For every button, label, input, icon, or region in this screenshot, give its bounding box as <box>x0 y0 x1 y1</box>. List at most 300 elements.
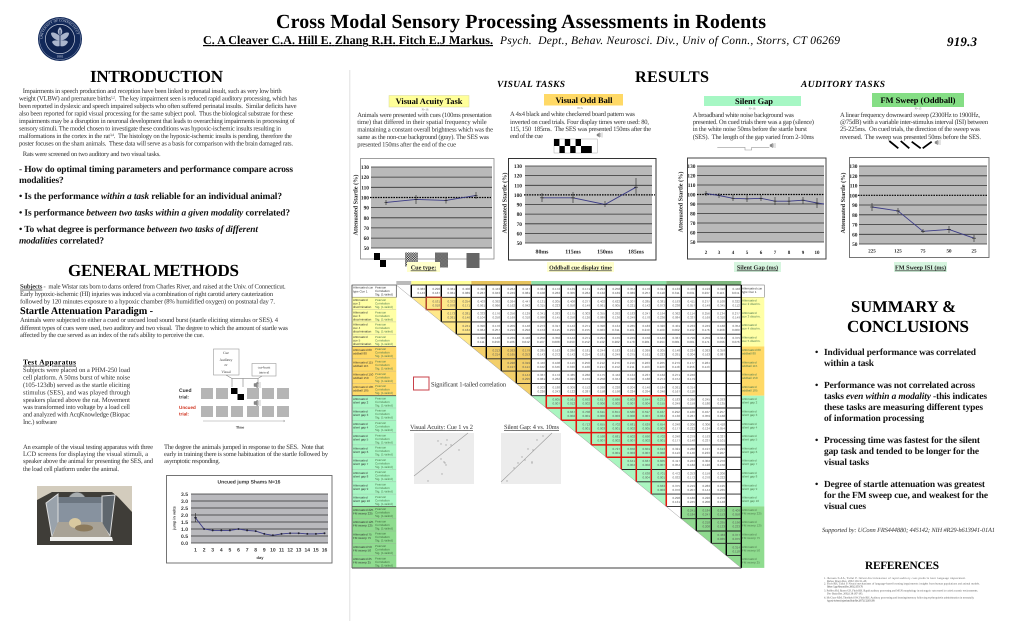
panel: fm sweep oddball <box>840 93 989 272</box>
text block: introduction paragraph: Impairments in speech production and reception have been linked to prenatal insult, such as very low birth <box>23 88 282 95</box>
correlation values: 0.213 0.263 0.179 0.285 0.163 0.286 0.181 0.244 0.183 0.161 0.269 0.205 0.148 0.224 0.263 0.359 <box>492 348 725 352</box>
left row labels: Attenuated <box>353 323 368 327</box>
chart: uncued jump shams <box>166 476 332 563</box>
x axis labels: 6 <box>237 548 240 554</box>
left row labels: Pearson <box>375 446 387 450</box>
correlation values: 0.214 0.165 0.253 0.143 0.272 0.142 0.254 0.181 0.249 0.275 0.161 0.223 0.291 0.204 0.163 0.087 <box>492 352 725 356</box>
x axis labels <box>868 248 977 254</box>
left row labels: oddball 115 <box>353 364 369 368</box>
y axis labels: 130 <box>514 164 522 170</box>
reference list: hypoxic-ischemic injured rats. Brain Res. 2007;1132:203-209. <box>827 600 875 602</box>
y axis labels: 80 <box>690 212 696 218</box>
right row labels: Attenuated <box>742 422 757 426</box>
bullet: across tasks: • <box>815 381 818 391</box>
left row labels: cue 3 <box>353 314 361 318</box>
right row labels: oddball 185 <box>742 388 758 392</box>
right row labels: cue 2 discrim. <box>742 302 761 306</box>
y axis labels: 80 <box>364 216 369 222</box>
text block: test apparatus: Inc.) software <box>23 419 57 426</box>
left row labels: discrimination <box>353 317 372 321</box>
text block: introduction paragraph: sensory stimuli. The model chosen to investigate these conditions was hypoxic-ischemic insults resulting in <box>19 125 282 132</box>
left row labels: Correlation <box>375 474 390 478</box>
x axis labels: 7 <box>246 548 249 554</box>
axis label: silent gap: Silent Gap (ms) <box>737 264 778 272</box>
task description: end of the cue <box>510 133 543 140</box>
heading: general methods: GENERAL METHODS <box>68 261 239 280</box>
text block: subjects: followed by 120 minutes exposure to a hypoxic chamber (8% humidified oxygen) on postnatal day 7. <box>20 298 275 306</box>
y axis labels: 3.0 <box>181 499 188 505</box>
sample size: N=16 <box>749 106 756 110</box>
icon: speaker <box>935 140 940 145</box>
text block: introduction paragraph: been reported in dyslexic and speech impaired subjects who often suffered perinatal insults. Similar deficits have <box>19 103 297 110</box>
x axis labels: 25 <box>972 248 977 254</box>
left row labels: Correlation <box>375 351 390 355</box>
panel: correlation matrix <box>352 281 764 568</box>
task description: @75dB) with a variable inter-stimulus interval (ISI) between <box>840 119 989 126</box>
y axis labels: 100 <box>687 192 696 198</box>
right row labels: Attenuated cue <box>742 286 763 290</box>
correlation values: 0.383 0.296 0.361 0.406 0.492 0.443 0.264 0.447 0.334 0.172 0.139 0.171 0.294 0.258 0.354 0.176 0.314 0.133 0.476 0.193 0.318 0.448 <box>418 287 740 291</box>
left row labels: Sig. (1-tailed) <box>375 465 393 469</box>
correlation values: 0.143 0.187 0.061 0.089 0.267 0.043 0.249 0.081 0.108 0.263 0.305 0.264 0.132 0.169 0.089 0.257 0.118 0.311 0.031 0.237 0.115 0.041 <box>418 291 740 295</box>
left row labels: silent gap 4 <box>353 425 369 429</box>
poster number: 919.3 <box>947 34 978 49</box>
correlation values: 0.184 0.247 0.153 0.058 <box>688 512 740 516</box>
heading: visual tasks: VISUAL TASKS <box>497 80 565 90</box>
y axis labels: 130 <box>849 164 858 170</box>
left row labels: Sig. (1-tailed) <box>375 403 393 407</box>
left row labels: Attenuated cue <box>353 286 374 290</box>
cue box: Cue <box>223 351 229 355</box>
left row labels: Correlation <box>375 424 390 428</box>
right row labels: Attenuated <box>742 508 757 512</box>
left row labels: Attenuated <box>353 310 368 314</box>
chart: attenuated startle by display time <box>502 158 656 272</box>
y axis labels: 60 <box>517 231 522 237</box>
text block: subjects: Subjects - male Wistar rats born to dams ordered from Charles River, and raised at the Univ. of Connecticut. <box>20 284 286 291</box>
chart: attenuated startle by cue type <box>352 158 494 272</box>
left row labels: Attenuated <box>353 446 368 450</box>
left row labels: silent gap 8 <box>353 474 369 478</box>
y axis title: jump in volts <box>172 506 176 531</box>
left row labels: Correlation <box>375 535 390 539</box>
correlation values: 0.531 0.372 0.254 0.403 0.392 0.264 0.447 0.131 0.205 0.408 0.277 0.402 0.622 0.207 0.285 0.381 0.193 0.411 0.277 0.108 0.322 <box>432 299 740 303</box>
text block: research questions: • Is performance between two tasks within a given modality correlated? <box>19 208 290 218</box>
left row labels: Attenuated <box>353 483 368 487</box>
bullet: startle attenuation <box>815 480 988 512</box>
data line <box>386 195 476 202</box>
within-task triangles <box>411 297 741 568</box>
data line <box>542 187 636 204</box>
left row labels: Pearson <box>375 421 387 425</box>
task title <box>872 93 964 107</box>
right row labels: FM sweep 50 <box>742 548 760 552</box>
left row labels: cue 2 <box>353 302 361 306</box>
x axis title: day <box>257 555 264 560</box>
text block: apparatus photo caption: An example of the visual testing apparatus with three <box>23 444 153 451</box>
icon: gap waveform <box>717 147 769 150</box>
left row labels: Sig. (1-tailed) <box>375 305 393 309</box>
axis label: fm sweep isi: FM Sweep ISI (ms) <box>895 264 946 272</box>
right row labels: Attenuated <box>742 385 757 389</box>
panel: summary and conclusions <box>815 297 995 602</box>
x axis labels <box>536 250 645 256</box>
bullet: individual performance: within a task <box>824 359 875 369</box>
x axis labels: 4 <box>732 250 735 256</box>
interval box <box>252 364 276 376</box>
left row labels: Attenuated <box>353 298 368 302</box>
task description <box>357 112 493 148</box>
right row labels: Attenuated <box>742 459 757 463</box>
text block: jump chart caption: asymptotic responding. <box>164 458 220 465</box>
left row labels: type Cue 1 <box>353 290 368 294</box>
reference list: 4. McClure MM, Threlkeld SW, Fitch RH. Auditory processing and learning/memory following erythropoietin administration in neonatally <box>824 596 975 600</box>
left row labels: silent gap 3 <box>353 413 369 417</box>
scatter plot: visual acuity cue 1 vs 2: Visual Acuity: Cue 1 vs 2 <box>410 424 473 431</box>
task description: 115, 150 185ms. The SES was presented 150ms after the <box>510 126 651 133</box>
axis label: silent gap <box>734 262 781 272</box>
left row labels: Correlation <box>375 363 390 367</box>
x axis labels: 14 <box>305 548 310 554</box>
left row labels: discrimination <box>353 305 372 309</box>
left row labels: Pearson <box>375 335 387 339</box>
right row labels: Attenuated <box>742 520 757 524</box>
task description: A linear frequency downward sweep (2300Hz to 1900Hz, <box>840 112 980 119</box>
task title: Visual Odd Ball <box>556 96 613 105</box>
text block: introduction paragraph: poster focuses on the sham animals. These data will serve as a basis for comparison with the brain damaged rats. <box>19 140 293 147</box>
sample size: N=16 <box>422 108 429 112</box>
axis label: cue type: Cue type: <box>411 264 436 272</box>
left row labels: Correlation <box>375 486 390 490</box>
text block: introduction paragraph: 1,2 <box>111 96 115 100</box>
bullet: startle attenuation: visual cues <box>824 502 866 512</box>
right row labels: Attenuated <box>742 483 757 487</box>
right row labels: silent gap 7 <box>742 462 758 466</box>
left row labels: silent gap 7 <box>353 462 369 466</box>
task description: inverted on cued trials. Four display times were used: 80, <box>510 119 649 126</box>
correlation values: 0.638 0.701 0.472 0.253 0.159 0.206 <box>642 472 725 476</box>
y axis title: Attenuated Startle (%) <box>678 172 684 232</box>
icon: speaker <box>597 132 602 138</box>
task description: maintaining a constant overall brightness which was the <box>357 126 493 134</box>
bullet: processing time: Processing time was fastest for the silent <box>824 436 981 446</box>
left row labels: Pearson <box>375 298 387 302</box>
task description <box>840 112 989 141</box>
x axis labels: 8 <box>254 548 257 554</box>
icon: checkerboard stimulus <box>554 139 597 153</box>
left row labels: Pearson <box>375 482 387 486</box>
right row labels: FM sweep 125 <box>742 524 762 528</box>
y axis labels: 100 <box>514 193 522 199</box>
right row labels: FM sweep 225 <box>742 511 762 515</box>
task title <box>704 96 801 106</box>
correlation values: 0.241 0.396 0.176 0.209 0.148 0.273 0.317 0.142 0.271 0.398 0.134 0.265 0.183 0.326 0.401 0.233 0.249 0.168 0.354 <box>462 324 740 328</box>
x axis labels: 2 <box>705 250 708 256</box>
left row labels: Pearson <box>375 409 387 413</box>
axis label: oddball cue display time: Oddball cue display time <box>549 264 612 272</box>
correlation values: 0.007 0.012 0.002 0.006 0.002 0.007 0.004 0.155 0.249 0.159 0.180 0.135 <box>552 402 725 406</box>
x axis labels: 225 <box>868 248 876 254</box>
right row labels: Attenuated <box>742 446 757 450</box>
icon: speaker on uncued row <box>254 400 260 406</box>
left row labels: silent gap 2 <box>353 401 369 405</box>
right row labels: Attenuated <box>742 545 757 549</box>
left row labels: Pearson <box>375 544 387 548</box>
left row labels: Correlation <box>375 326 390 330</box>
cued trial squares <box>201 388 289 400</box>
bullet: individual performance: • <box>815 348 818 358</box>
right row labels: oddball 115 <box>742 364 758 368</box>
left row labels: Attenuated <box>353 335 368 339</box>
chart: attenuated startle by ISI <box>840 158 989 272</box>
right row labels <box>742 286 763 565</box>
scatter plot: silent gap 4 vs 10ms <box>501 424 561 484</box>
bullet: across tasks <box>815 381 987 424</box>
axis label: cue type <box>407 262 440 272</box>
text block: test apparatus: Test Apparatus <box>23 358 76 367</box>
left row labels: Attenuated 185 <box>353 385 374 389</box>
correlation values: 0.144 0.367 0.172 0.485 0.266 0.175 0.442 0.134 0.237 0.162 0.271 0.246 <box>522 373 695 377</box>
task title: Visual Acuity Task <box>396 97 463 106</box>
left row labels: oddball 150 <box>353 376 369 380</box>
left row labels: Attenuated <box>353 397 368 401</box>
task title: Silent Gap <box>735 97 773 106</box>
heading: startle attenuation paradigm: Startle Attenuation Paradigm - <box>20 306 154 317</box>
right row labels: cue 4 discrim. <box>742 327 761 331</box>
left row labels: oddball 80 <box>353 352 367 356</box>
right row labels: Attenuated <box>742 532 757 536</box>
correlation values: 0.002 0.001 0.006 0.003 0.008 0.007 0.034 0.136 0.267 0.059 0.168 <box>568 414 725 418</box>
legend: significant correlation <box>414 377 507 390</box>
correlation values: 0.118 <box>732 549 740 553</box>
correlation values: 0.173 0.281 0.333 0.176 0.256 0.129 0.341 0.283 0.175 0.303 0.355 0.292 0.183 0.247 0.194 0.362 0.114 0.256 0.134 0.277 <box>448 312 740 316</box>
left row labels: FM sweep 75 <box>353 536 371 540</box>
correlation values: 0.598 0.681 0.602 0.690 0.702 0.248 0.279 0.193 0.337 <box>598 435 725 439</box>
icon: university seal logo <box>38 17 82 61</box>
interval box: interval <box>259 370 269 374</box>
right row labels: silent gap 3 <box>742 413 758 417</box>
text block: introduction paragraph: impairments may be a disruption in neuronal development that leads to overarching impairments in processing of <box>19 118 296 125</box>
left row labels: oddball 185 <box>353 388 369 392</box>
task title <box>389 96 469 107</box>
x axis labels: 4 <box>220 548 223 554</box>
y axis labels <box>181 492 188 547</box>
x axis labels: 8 <box>788 250 791 256</box>
reference list: Behav Brain Res. 2002;136:31-49. <box>827 580 867 583</box>
correlation values: 0.004 0.001 0.032 0.172 0.278 0.222 <box>642 476 725 480</box>
y axis labels: 1.0 <box>181 527 188 533</box>
left row labels: Correlation <box>375 437 390 441</box>
right row labels: Attenuated 80 <box>742 348 761 352</box>
y axis labels: 60 <box>364 236 369 242</box>
sample size: N=6 <box>577 106 583 110</box>
task title <box>544 94 623 106</box>
bullet: across tasks: tasks even within a modality -this indicates <box>824 392 987 402</box>
left row labels: Attenuated 225 <box>353 508 374 512</box>
y axis labels: 50 <box>517 241 522 247</box>
x axis labels: 125 <box>894 248 902 254</box>
left row labels: Sig. (1-tailed) <box>375 416 393 420</box>
text block: subjects: Early hypoxic-ischemic (HI) injuries was induced via a combination of right carotid artery cauterization <box>20 291 274 298</box>
right row labels: silent gap 5 <box>742 438 758 442</box>
text block: research questions <box>19 165 293 246</box>
cue box: Auditory <box>220 358 233 362</box>
left row labels <box>353 286 393 567</box>
x axis labels: 9 <box>263 548 266 554</box>
right row labels: oddball 150 <box>742 376 758 380</box>
left row labels: Correlation <box>375 400 390 404</box>
left row labels: Attenuated 115 <box>353 360 373 364</box>
text block: paradigm description: Animals were subjected to either a cued or uncued loud sound burst (startle eliciting stimulus or SES). 4 <box>20 317 279 324</box>
left row labels: Attenuated 75 <box>353 532 372 536</box>
scatter plot: visual acuity cue 1 vs 2 <box>410 424 474 484</box>
right labels background <box>741 285 764 568</box>
left row labels: Attenuated 150 <box>353 373 374 377</box>
axis label: oddball cue display time <box>547 262 614 272</box>
correlation values: 0.463 0.377 <box>718 533 740 537</box>
y axis labels <box>361 165 369 252</box>
diagram: cued and uncued trial timeline <box>179 349 289 430</box>
text block: introduction paragraph: 3,4 <box>110 133 114 137</box>
y axis labels: 2.5 <box>181 506 188 512</box>
bullet: across tasks: of information processing <box>824 414 924 424</box>
right row labels: Attenuated <box>742 298 757 302</box>
bullet: processing time: gap task and tended to be longer for the <box>824 447 979 457</box>
bullet: startle attenuation: for the FM sweep cue, and weakest for the <box>824 491 988 501</box>
text block: research questions: modalities? <box>19 176 64 186</box>
right row labels: Attenuated <box>742 335 757 339</box>
correlation values: 0.184 0.064 0.257 0.219 0.292 0.153 0.115 0.299 0.155 0.063 0.311 0.161 0.249 0.109 0.062 0.192 0.176 0.268 0.089 <box>462 328 740 332</box>
funding note: Supported by: UConn FRS444880; 445142; NIH #R29-h613941-01A1 <box>822 527 995 534</box>
matrix header band <box>396 281 741 285</box>
left row labels: cue 5 <box>353 338 361 342</box>
text block: jump chart caption: early in training there is some habituation of the startle followed by <box>164 451 329 458</box>
left row labels: Attenuated <box>353 410 368 414</box>
data line <box>196 518 324 535</box>
y axis labels: 110 <box>850 184 858 190</box>
task description: (SES). The length of the gap varied from 2-10ms <box>693 134 814 141</box>
data line <box>706 194 824 204</box>
text block: introduction paragraph: . The histology on the hypoxic-ischemic insults is pending, therefore the <box>114 133 292 140</box>
text block: introduction paragraph: Rats were screened on two auditory and two visual tasks. <box>23 151 161 158</box>
reference list: 1. Benasich AA, Tallal P. Infant discrimination of rapid auditory cues predicts later language impairment. <box>824 577 966 580</box>
correlation values: 0.727 0.650 0.601 0.613 0.321 0.288 0.197 0.219 <box>612 447 725 451</box>
y axis labels: 120 <box>361 175 369 181</box>
y axis labels: 2.0 <box>181 513 188 519</box>
correlation values: 0.298 0.186 0.226 0.278 <box>672 496 725 500</box>
correlation values: 0.713 0.655 0.702 0.681 0.629 0.654 0.248 0.206 0.306 0.418 <box>582 422 725 426</box>
y axis labels: 50 <box>364 246 369 252</box>
bullet: individual performance <box>815 348 977 369</box>
left row labels: Correlation <box>375 560 390 564</box>
y axis labels: 120 <box>849 174 858 180</box>
left row labels: Sig. (1-tailed) <box>375 379 393 383</box>
task description: reversed. The sweep was presented 50ms before the SES. <box>840 134 981 141</box>
text block: test apparatus: stimulus (SES), and was played through <box>23 390 131 396</box>
x axis labels: 16 <box>322 548 327 554</box>
correlation values: 0.228 0.319 0.446 0.108 0.119 0.258 0.212 0.276 0.216 0.263 0.205 0.279 0.177 0.284 <box>508 361 710 365</box>
text block: paradigm description <box>20 317 288 339</box>
right row labels: silent gap 2 <box>742 401 758 405</box>
x axis labels: 13 <box>296 548 302 554</box>
text block: apparatus photo caption <box>23 444 154 473</box>
left row labels: Pearson <box>375 310 387 314</box>
left row labels: FM sweep 225 <box>353 511 373 515</box>
icon: university seal logo: 1881 <box>57 54 64 58</box>
x axis labels: 12 <box>287 548 293 554</box>
bullet: across tasks: Performance was not correlated across <box>824 381 975 391</box>
left row labels: Sig. (1-tailed) <box>375 366 393 370</box>
x axis labels: 50 <box>946 248 952 254</box>
panel: general methods <box>20 261 332 563</box>
left row labels: Attenuated 25 <box>353 557 372 561</box>
left row labels: Sig. (1-tailed) <box>375 563 393 567</box>
y axis labels: 70 <box>364 226 369 232</box>
y axis labels: 100 <box>849 193 858 199</box>
y axis labels <box>849 164 858 248</box>
panel: visual odd ball <box>502 94 656 272</box>
panel: introduction <box>19 67 297 246</box>
left row labels: Pearson <box>375 519 387 523</box>
left row labels: Sig. (1-tailed) <box>375 490 393 494</box>
bullet: processing time <box>815 436 981 468</box>
left row labels: Sig. (1-tailed) <box>375 514 393 518</box>
x axis labels: 115ms <box>565 250 581 256</box>
text block: subjects <box>20 284 286 306</box>
text block: introduction paragraph: weight (VLBW) and premature births <box>19 96 111 103</box>
right row labels: Attenuated <box>742 373 757 377</box>
bullet: individual performance: Individual performance was correlated <box>824 348 977 358</box>
task description: presented. On cued trials there was a gap (silence) <box>693 119 814 126</box>
correlation values: 0.218 0.295 0.196 <box>702 521 740 525</box>
icon: speaker <box>770 143 775 148</box>
label: cued trial: Cued <box>179 388 192 394</box>
left row labels: Pearson <box>375 470 387 474</box>
right row labels: Attenuated <box>742 311 757 315</box>
y axis labels: 90 <box>852 203 858 209</box>
diagram: cued and uncued trial timeline: trial: <box>179 412 189 416</box>
text block: apparatus photo caption: LCD screens for displaying the visual stimuli, a <box>23 451 148 458</box>
cue box <box>214 349 239 375</box>
left row labels: Attenuated <box>353 471 368 475</box>
text block: paradigm description: different types of cues were used, two auditory and two visual. The degree to which the amount of startle was <box>20 325 288 332</box>
correlation values: 0.197 0.114 0.042 0.346 0.330 0.168 0.214 0.152 0.211 0.163 0.223 0.148 0.256 0.143 <box>508 365 710 369</box>
x axis labels: 9 <box>802 250 805 256</box>
y axis labels: 80 <box>852 213 858 219</box>
correlation values: 0.663 0.375 0.219 0.283 0.195 <box>658 484 725 488</box>
right row labels: FM sweep 25 <box>742 561 760 565</box>
x axis labels: 2 <box>203 548 206 554</box>
left row labels: discrimination <box>353 330 372 334</box>
y axis labels: 130 <box>361 165 369 171</box>
left row labels: Sig. (1-tailed) <box>375 342 393 346</box>
text block: test apparatus: (105-123db) served as the startle eliciting <box>23 382 131 389</box>
right row labels: Attenuated <box>742 434 757 438</box>
left row labels: Attenuated <box>353 422 368 426</box>
left row labels: Attenuated 50 <box>353 545 372 549</box>
y axis labels: 60 <box>690 230 696 236</box>
y axis labels: 130 <box>687 164 696 170</box>
right row labels: silent gap 9 <box>742 487 758 491</box>
left row labels: Sig. (1-tailed) <box>375 391 393 395</box>
left row labels: Correlation <box>375 498 390 502</box>
title: Cross Modal Sensory Processing Assessments in Rodents <box>276 11 766 33</box>
y axis labels <box>514 164 522 247</box>
text block: test apparatus: and analyzed with AcqKnowledge (Biopac <box>23 412 130 418</box>
photo: visual testing apparatus <box>37 486 132 545</box>
left row labels: FM sweep 25 <box>353 561 371 565</box>
icon: university seal logo: UNIVERSITY OF CONNECTICUT <box>40 19 80 39</box>
